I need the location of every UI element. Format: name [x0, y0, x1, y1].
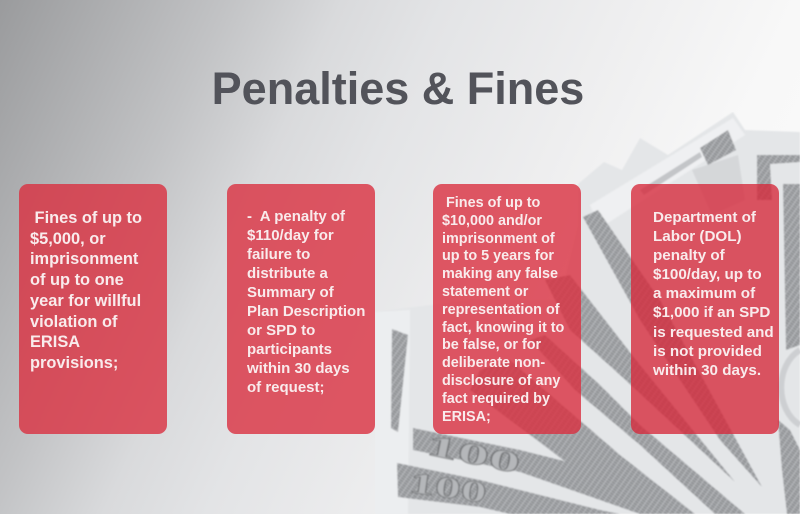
panel: willful violation penalty: $5,000, or — [30, 230, 106, 248]
panel: Department of Labor penalty: Department of — [653, 209, 756, 226]
panel: false statement penalty: making any false — [442, 266, 558, 282]
panel: Department of Labor penalty: within 30 days. — [653, 362, 761, 379]
panel: SPD distribution penalty — [227, 184, 375, 434]
panel: false statement penalty: fact, knowing it to — [442, 320, 564, 336]
panel: Department of Labor penalty: penalty of — [653, 247, 725, 264]
panel: SPD distribution penalty: within 30 days — [247, 360, 350, 377]
panel: SPD distribution penalty: participants — [247, 341, 332, 358]
panel: Department of Labor penalty: is not provided — [653, 343, 762, 360]
panel: false statement penalty: fact required by — [442, 391, 550, 407]
bottom bands — [397, 463, 620, 514]
panel: willful violation penalty: provisions; — [30, 354, 118, 372]
panel: Department of Labor penalty — [631, 184, 779, 434]
panel: willful violation penalty: violation of — [30, 313, 117, 331]
panel: SPD distribution penalty: or SPD to — [247, 322, 315, 339]
bill backdrop — [375, 112, 800, 514]
panel: Department of Labor penalty: a maximum of — [653, 285, 755, 302]
panel: SPD distribution penalty: Summary of — [247, 284, 334, 301]
panel: SPD distribution penalty: of request; — [247, 379, 325, 396]
panel: willful violation penalty: Fines of up to — [35, 209, 142, 227]
panel: willful violation penalty: ERISA — [30, 333, 80, 351]
top bill corner ornament — [700, 130, 736, 165]
panel: false statement penalty: imprisonment of — [442, 231, 555, 247]
panel: willful violation penalty: year for willful — [30, 292, 141, 310]
panel: false statement penalty: disclosure of any — [442, 373, 560, 389]
panel: false statement penalty: up to 5 years for — [442, 248, 554, 264]
panel: false statement penalty: Fines of up to — [446, 195, 540, 211]
panel: false statement penalty: $10,000 and/or — [442, 213, 542, 229]
panel: Department of Labor penalty: $1,000 if an SPD — [653, 304, 770, 321]
panel: SPD distribution penalty: failure to — [247, 246, 310, 263]
panel: Department of Labor penalty: is requested and — [653, 324, 774, 341]
panel: false statement penalty — [433, 184, 581, 434]
panel: Department of Labor penalty: Labor (DOL) — [653, 228, 742, 245]
panel: willful violation penalty: of up to one — [30, 271, 124, 289]
panel: false statement penalty: representation of — [442, 302, 560, 318]
left edge strip — [391, 329, 408, 432]
panel: SPD distribution penalty: distribute a — [247, 265, 328, 282]
photo: fan of hundred dollar bills: 100 — [424, 429, 523, 481]
right bill frame — [757, 155, 800, 200]
panel: false statement penalty: deliberate non- — [442, 355, 545, 371]
panel: willful violation penalty: imprisonment — [30, 250, 138, 268]
panel: false statement penalty: be false, or for — [442, 337, 541, 353]
panel: willful violation penalty — [19, 184, 167, 434]
photo: fan of hundred dollar bills: 100 — [407, 466, 489, 510]
panel: Department of Labor penalty: $100/day, up to — [653, 266, 762, 283]
panel: false statement penalty: ERISA; — [442, 409, 491, 425]
panel: SPD distribution penalty: - A penalty of — [247, 208, 345, 225]
panel: SPD distribution penalty: Plan Description — [247, 303, 365, 320]
title: Penalties & Fines — [212, 63, 584, 114]
panel: false statement penalty: statement or — [442, 284, 528, 300]
panel: SPD distribution penalty: $110/day for — [247, 227, 334, 244]
